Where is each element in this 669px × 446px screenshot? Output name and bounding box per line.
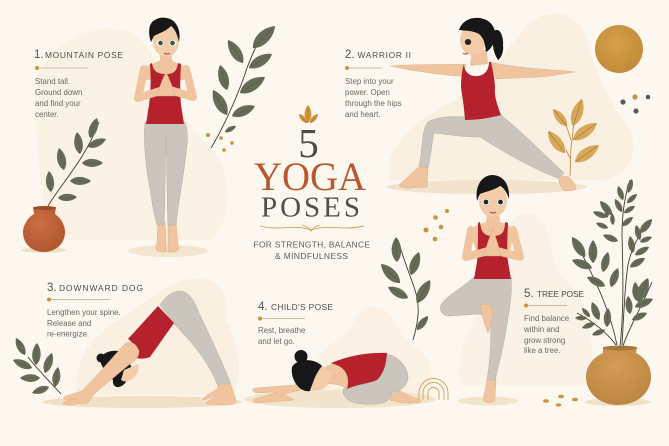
pot	[586, 347, 651, 405]
title: & MINDFULNESS	[275, 251, 348, 261]
title	[254, 120, 370, 261]
stem	[28, 357, 61, 394]
figure: tree pose	[440, 175, 520, 406]
head	[479, 185, 507, 217]
rule	[345, 66, 382, 70]
label 4: child's pose	[258, 301, 333, 346]
label 5: tree pose: TREE POSE	[537, 289, 584, 299]
description: center.	[35, 110, 59, 119]
decorative seeds	[543, 395, 578, 407]
hair	[477, 175, 509, 201]
description: and find your	[35, 99, 81, 108]
description: power. Open	[345, 88, 390, 97]
arms	[63, 342, 139, 405]
leaves	[568, 178, 655, 338]
top	[128, 306, 174, 359]
hair	[149, 18, 180, 42]
label 4: child's pose: CHILD'S POSE	[271, 302, 333, 312]
stem	[398, 240, 418, 340]
description: Stand tall.	[35, 77, 70, 86]
description: grow strong	[524, 336, 565, 345]
leggings	[343, 354, 408, 404]
bent foot	[480, 304, 492, 333]
face	[310, 366, 333, 391]
figure: mountain pose	[128, 18, 208, 257]
rule	[258, 316, 305, 320]
heading: 4.	[258, 301, 268, 313]
label 3: downward dog: DOWNWARD DOG	[59, 283, 143, 293]
stem	[566, 122, 574, 176]
face	[156, 40, 176, 54]
description: Ground down	[35, 88, 82, 97]
head	[153, 25, 179, 57]
decorative dots: centre	[424, 209, 449, 241]
description: Step into your	[345, 77, 394, 86]
label 1: mountain pose	[34, 49, 123, 119]
leaves	[377, 237, 434, 332]
description: within and	[523, 325, 560, 334]
top	[331, 353, 387, 389]
mat	[42, 396, 242, 408]
description: re-energize.	[47, 330, 89, 338]
plant: upper centre branch	[206, 22, 279, 152]
title ornament	[297, 105, 320, 125]
label 5: tree pose	[523, 288, 584, 355]
standing foot	[483, 378, 496, 402]
heading: 1.	[34, 49, 44, 61]
hair bun	[96, 354, 106, 362]
face	[482, 199, 504, 213]
leaves	[544, 97, 602, 167]
leaves	[208, 22, 279, 134]
description: through the hips	[345, 99, 402, 108]
heading: 2.	[345, 49, 355, 61]
label 3: downward dog	[47, 282, 143, 338]
background blob: mountain pose	[35, 29, 227, 240]
label 1: mountain pose: MOUNTAIN POSE	[45, 50, 123, 60]
flourish	[260, 225, 364, 231]
description: Find balance	[524, 314, 570, 323]
heading: 3.	[47, 282, 57, 294]
word POSES: POSES	[261, 192, 360, 224]
description: Lengthen your spine.	[47, 308, 121, 317]
background blob: downward dog	[77, 278, 239, 395]
mat	[458, 396, 518, 406]
potted plant: left terracotta	[22, 117, 108, 253]
subtitle: FOR STRENGTH, BALANCE	[254, 240, 370, 250]
description: and heart.	[345, 110, 381, 119]
head	[460, 24, 486, 56]
leggings	[419, 115, 564, 178]
figure: warrior II	[387, 18, 587, 194]
hair	[100, 351, 132, 387]
arms	[466, 230, 520, 257]
mat	[387, 180, 587, 194]
pot	[23, 207, 65, 252]
rule	[35, 66, 88, 70]
foot	[390, 388, 421, 403]
arms	[390, 62, 575, 79]
leggings	[440, 277, 511, 380]
feet	[399, 165, 576, 191]
neck	[470, 50, 488, 66]
sun	[595, 25, 643, 73]
hair bun	[294, 350, 308, 363]
label 2: warrior II: WARRIOR II	[358, 50, 411, 60]
praying hands	[484, 229, 501, 256]
leaves	[11, 336, 62, 396]
heading: 5.	[524, 288, 534, 300]
top	[146, 63, 184, 124]
face	[463, 39, 471, 54]
pot shadow	[22, 247, 66, 253]
description: and let go.	[258, 337, 295, 346]
leggings	[160, 291, 231, 384]
plant: lower left branch	[11, 336, 62, 396]
rule	[47, 298, 110, 302]
stem	[48, 122, 99, 206]
numeral five: 5	[298, 120, 319, 166]
figure: downward dog	[42, 291, 242, 408]
top	[474, 222, 511, 279]
neck and chest	[470, 212, 514, 250]
arms	[138, 69, 193, 98]
feet	[203, 382, 236, 405]
face	[121, 364, 139, 382]
rainbow arcs	[419, 378, 448, 400]
arms	[253, 364, 348, 403]
stems	[577, 180, 652, 347]
plant: golden leaves	[544, 97, 602, 176]
label 2: warrior II	[345, 49, 411, 119]
background blob: child's pose	[312, 307, 431, 395]
stem	[211, 37, 262, 148]
top	[461, 62, 501, 120]
background blob: warrior	[389, 14, 633, 180]
description: like a tree.	[524, 346, 560, 355]
potted plant: right	[568, 178, 655, 406]
background blob: tree pose	[459, 213, 592, 385]
plant: lower centre branch	[377, 237, 434, 340]
praying hands	[157, 72, 175, 96]
mat	[244, 390, 436, 408]
neck and chest	[143, 50, 186, 80]
description: Release and	[47, 319, 91, 328]
pot shadow	[585, 398, 651, 406]
leaves	[45, 117, 108, 202]
hair	[292, 360, 322, 391]
ponytail	[493, 30, 503, 60]
mat	[128, 245, 208, 257]
leggings	[144, 122, 187, 225]
description: Rest, breathe	[258, 326, 306, 335]
dots	[206, 133, 234, 152]
rule	[524, 304, 567, 308]
feet	[156, 222, 179, 252]
hair	[459, 18, 495, 52]
figure: child's pose	[244, 350, 448, 408]
word YOGA: YOGA	[254, 154, 366, 199]
decorative dots: upper right	[620, 94, 650, 114]
